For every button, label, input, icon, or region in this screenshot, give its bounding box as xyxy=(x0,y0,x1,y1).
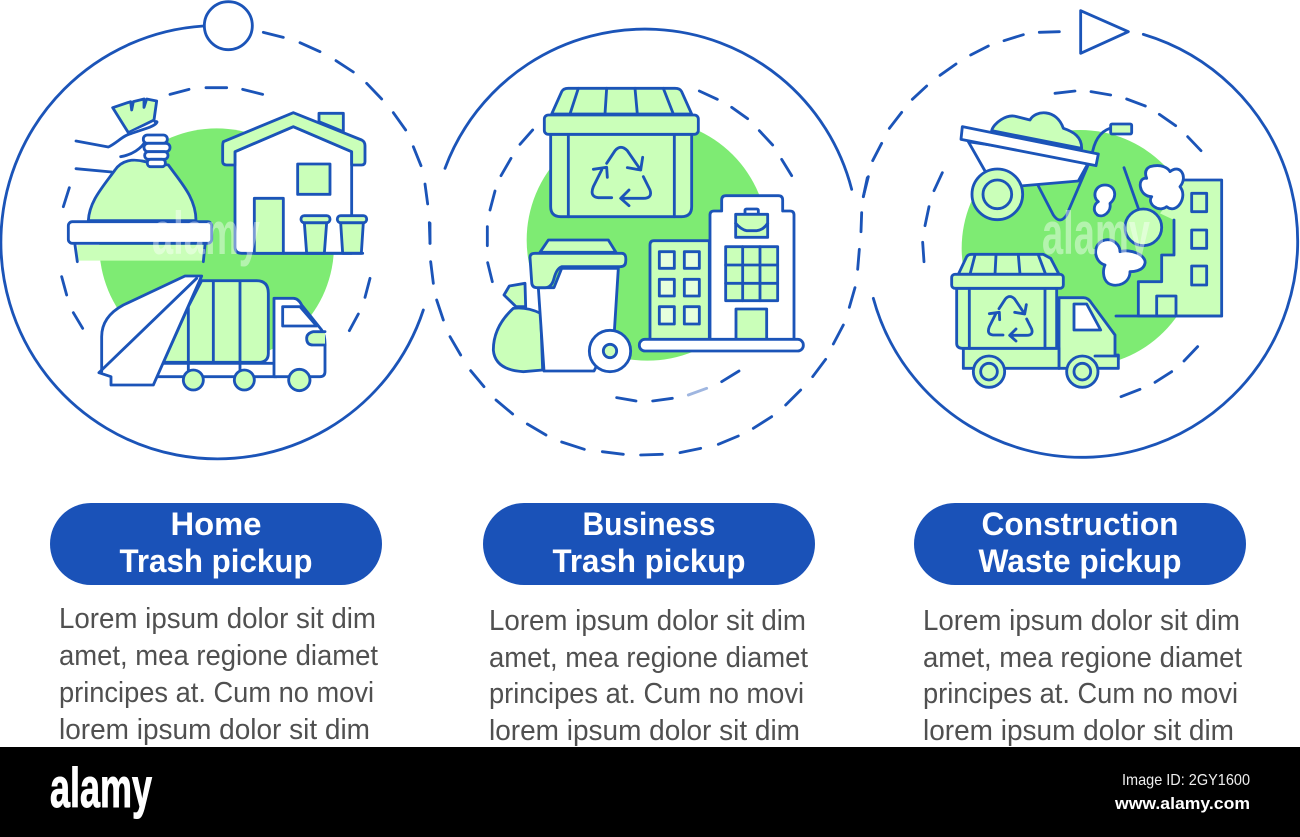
text block: construction description xyxy=(923,605,1242,747)
label pill: construction waste pickup: Construction xyxy=(982,506,1178,542)
text block: business description: lorem ipsum dolor sit dim xyxy=(489,715,800,747)
icon: house with bins xyxy=(223,113,367,253)
label pill: home trash pickup: Home xyxy=(170,506,262,542)
text block: construction description: lorem ipsum dolor sit dim xyxy=(923,715,1234,747)
arrow: play triangle marker xyxy=(1081,11,1128,53)
label pill: construction waste pickup xyxy=(914,503,1246,585)
label pill: business trash pickup xyxy=(483,503,815,585)
text block: business description xyxy=(489,605,808,747)
icon: building with wrecking ball xyxy=(1094,166,1222,316)
text block: construction description: principes at. Cum no movi xyxy=(923,678,1238,710)
text block: home description: amet, mea regione diamet xyxy=(59,640,378,672)
panel: construction waste pickup illustration xyxy=(863,11,1298,457)
text block: construction description: amet, mea regione diamet xyxy=(923,642,1242,674)
panel: home trash pickup illustration xyxy=(1,2,430,459)
inner dashed ring faded segment xyxy=(688,388,707,395)
footer logo: alamy xyxy=(50,756,152,819)
website: www.alamy.com xyxy=(1114,794,1250,813)
label pill: home trash pickup xyxy=(50,503,382,585)
icon: hand with trash bag xyxy=(68,99,212,262)
icon: recycling dumpster xyxy=(544,88,698,217)
label pill: home trash pickup: Trash pickup xyxy=(120,543,312,579)
icon: wheelbarrow with rubble xyxy=(961,113,1132,220)
label pill: business trash pickup: Business xyxy=(582,506,716,542)
inner dashed ring xyxy=(923,91,1201,397)
text block: construction description: Lorem ipsum dolor sit dim xyxy=(923,605,1240,637)
outer dashed arc xyxy=(863,32,1059,197)
inner dashed ring xyxy=(487,91,792,401)
text block: home description: lorem ipsum dolor sit dim xyxy=(59,714,370,746)
text block: business description: principes at. Cum no movi xyxy=(489,678,804,710)
outer solid arc xyxy=(445,29,852,189)
text block: business description: amet, mea regione diamet xyxy=(489,642,808,674)
outer solid arc xyxy=(873,34,1298,457)
label pill: construction waste pickup: Waste pickup xyxy=(978,543,1182,579)
icon: garbage truck xyxy=(99,276,325,391)
watermark: right panel: alamy xyxy=(1042,200,1150,267)
start marker circle xyxy=(204,2,252,50)
footer band xyxy=(0,747,1300,837)
outer dashed ring xyxy=(263,32,430,243)
watermark: left panel: alamy xyxy=(152,200,260,267)
text block: home description xyxy=(59,603,378,746)
text block: business description: Lorem ipsum dolor sit dim xyxy=(489,605,806,637)
green backdrop circle xyxy=(962,130,1198,367)
inner dashed ring xyxy=(62,88,370,331)
panel: business trash pickup illustration xyxy=(430,29,868,455)
image id: Image ID: 2GY1600 xyxy=(1122,772,1250,789)
outer dashed ring xyxy=(430,177,868,455)
green backdrop circle xyxy=(527,119,768,361)
label pill: business trash pickup: Trash pickup xyxy=(552,543,746,579)
green backdrop circle xyxy=(99,128,334,363)
icon: office buildings xyxy=(639,196,803,351)
text block: home description: principes at. Cum no movi xyxy=(59,677,374,709)
text block: home description: Lorem ipsum dolor sit dim xyxy=(59,603,376,635)
icon: wheelie bin and bag xyxy=(493,240,631,372)
icon: recycling truck xyxy=(952,254,1118,387)
outer solid ring xyxy=(1,26,423,459)
